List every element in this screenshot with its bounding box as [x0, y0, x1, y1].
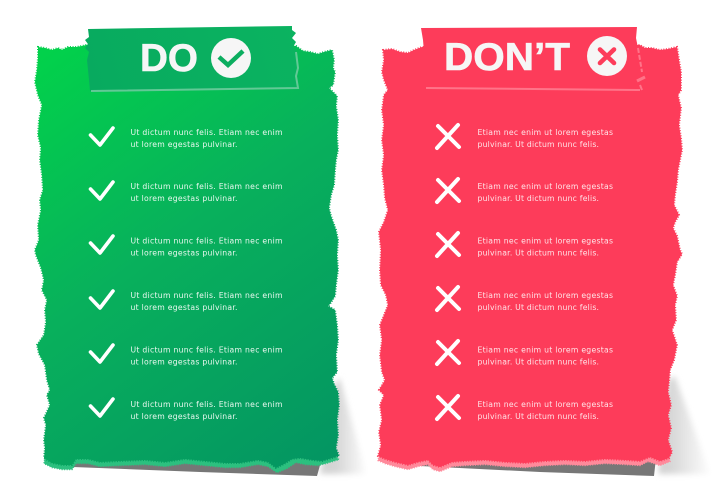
- green torn paper background: [35, 44, 339, 468]
- don't item 2: pulvinar. Ut dictum nunc felis.: [478, 194, 599, 203]
- list: do items: [90, 128, 282, 421]
- panel: don't: [378, 27, 710, 476]
- don't item 3: Etiam nec enim ut lorem egestas: [478, 236, 613, 246]
- don't item 3: [437, 233, 613, 258]
- paper underside shadow: do panel: [73, 458, 322, 476]
- soft shadow: do panel: [320, 378, 366, 474]
- don't item 6: pulvinar. Ut dictum nunc felis.: [478, 412, 599, 421]
- don't item 1: Etiam nec enim ut lorem egestas: [478, 128, 613, 137]
- heading: DO: DO: [140, 37, 198, 80]
- don't item 2: Etiam nec enim ut lorem egestas: [478, 182, 613, 191]
- banner: do: [85, 26, 298, 91]
- paper underside shadow: don't panel: [420, 458, 656, 476]
- don't item 1: pulvinar. Ut dictum nunc felis.: [478, 140, 599, 149]
- do item 1: [90, 128, 282, 149]
- don't item 6: Etiam nec enim ut lorem egestas: [478, 400, 613, 409]
- banner: don't: [421, 27, 645, 90]
- do item 4: Ut dictum nunc felis. Etiam nec enim: [130, 291, 282, 300]
- banner ribbon: [85, 26, 297, 91]
- soft shadow: don't panel: [658, 376, 710, 474]
- heading: DON'T: DON’T: [444, 36, 570, 79]
- do item 4: ut lorem egestas pulvinar.: [130, 303, 238, 312]
- torn edge highlight: do panel: [44, 452, 339, 472]
- don't item 3: pulvinar. Ut dictum nunc felis.: [478, 248, 599, 258]
- do item 2: Ut dictum nunc felis. Etiam nec enim: [130, 182, 282, 191]
- banner highlight lines: [426, 48, 645, 90]
- don't item 5: Etiam nec enim ut lorem egestas: [478, 346, 613, 354]
- do item 5: ut lorem egestas pulvinar.: [130, 358, 238, 366]
- do item 2: ut lorem egestas pulvinar.: [130, 194, 238, 203]
- don't item 4: pulvinar. Ut dictum nunc felis.: [478, 303, 599, 312]
- torn edge highlight: don't panel: [378, 452, 670, 472]
- banner highlight line: [91, 52, 298, 91]
- icon: cross badge: [587, 36, 627, 76]
- do item 6: [90, 399, 282, 421]
- list: don't items: [437, 125, 613, 421]
- don't item 1: [437, 125, 613, 149]
- don't item 6: [437, 396, 613, 421]
- don't item 5: pulvinar. Ut dictum nunc felis.: [478, 358, 599, 366]
- don't item 5: [437, 341, 613, 366]
- do item 5: Ut dictum nunc felis. Etiam nec enim: [130, 346, 282, 354]
- banner ribbon: [421, 27, 640, 88]
- do item 2: [90, 182, 282, 203]
- do item 6: ut lorem egestas pulvinar.: [130, 412, 238, 421]
- do item 1: Ut dictum nunc felis. Etiam nec enim: [130, 128, 282, 137]
- do item 4: [90, 291, 282, 312]
- panel: do: [35, 26, 366, 476]
- do item 5: [90, 345, 282, 366]
- do item 1: ut lorem egestas pulvinar.: [130, 140, 238, 149]
- do item 3: [90, 236, 282, 258]
- red torn paper background: [378, 45, 682, 467]
- don't item 4: [437, 287, 613, 312]
- do item 3: Ut dictum nunc felis. Etiam nec enim: [130, 236, 282, 246]
- icon: check badge: [211, 38, 251, 78]
- don't item 4: Etiam nec enim ut lorem egestas: [478, 291, 613, 300]
- do item 6: Ut dictum nunc felis. Etiam nec enim: [130, 400, 282, 409]
- don't item 2: [437, 179, 613, 203]
- do item 3: ut lorem egestas pulvinar.: [130, 248, 238, 258]
